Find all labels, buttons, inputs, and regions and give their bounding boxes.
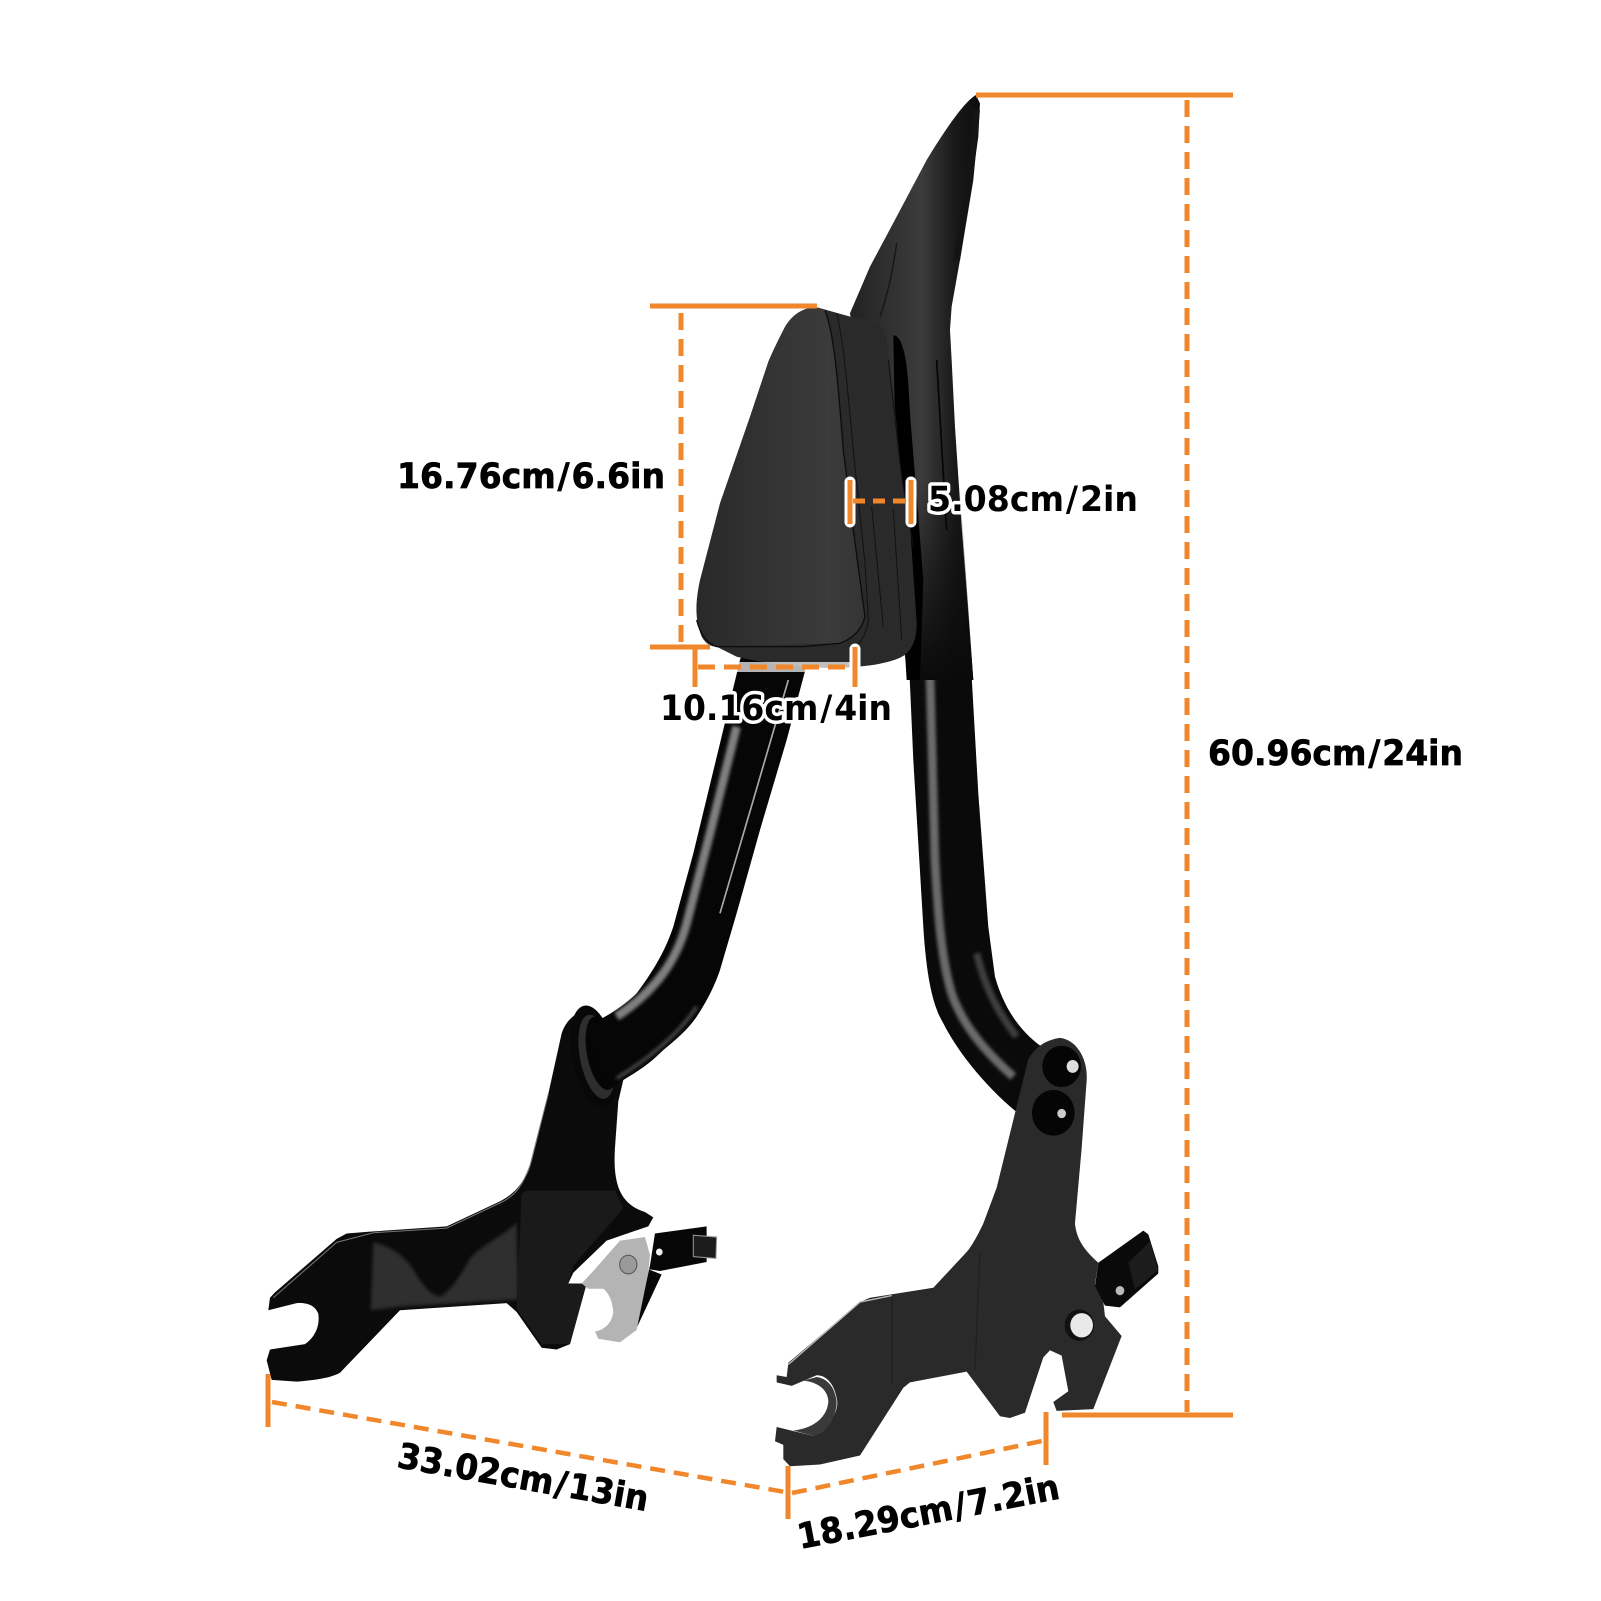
dimension: pad thickness	[850, 480, 1138, 524]
label: bracket width: 18.29cm/7.2in	[794, 1468, 1063, 1558]
dimension: bracket width	[792, 1412, 1063, 1558]
silver hook	[582, 1237, 650, 1342]
label: pad height: 16.76cm/6.6in	[397, 457, 665, 497]
mounting hole	[1065, 1310, 1094, 1341]
label: bracket length: 33.02cm/13in	[394, 1436, 652, 1520]
dimension: bracket length	[268, 1374, 788, 1520]
latch arm	[635, 1226, 717, 1332]
tube collar	[562, 1001, 626, 1113]
dimension: pad height	[397, 306, 817, 647]
label: pad thickness: 5.08cm/2in	[928, 480, 1138, 520]
backrest pad	[696, 308, 917, 668]
dimension: overall height	[976, 95, 1463, 1415]
left bracket	[267, 1001, 717, 1382]
latch block	[1095, 1231, 1158, 1307]
bracket plate	[775, 1038, 1122, 1466]
label: overall height: 60.96cm/24in	[1208, 734, 1463, 774]
bolts	[1032, 1046, 1081, 1136]
bracket plate	[267, 1009, 653, 1382]
product: upright spine and pad	[696, 95, 980, 680]
label: pad width: 10.16cm/4in	[660, 689, 892, 729]
right tube	[908, 647, 1047, 1120]
left tube	[587, 640, 813, 1090]
upright spine	[850, 95, 980, 680]
right bracket	[775, 1038, 1158, 1466]
